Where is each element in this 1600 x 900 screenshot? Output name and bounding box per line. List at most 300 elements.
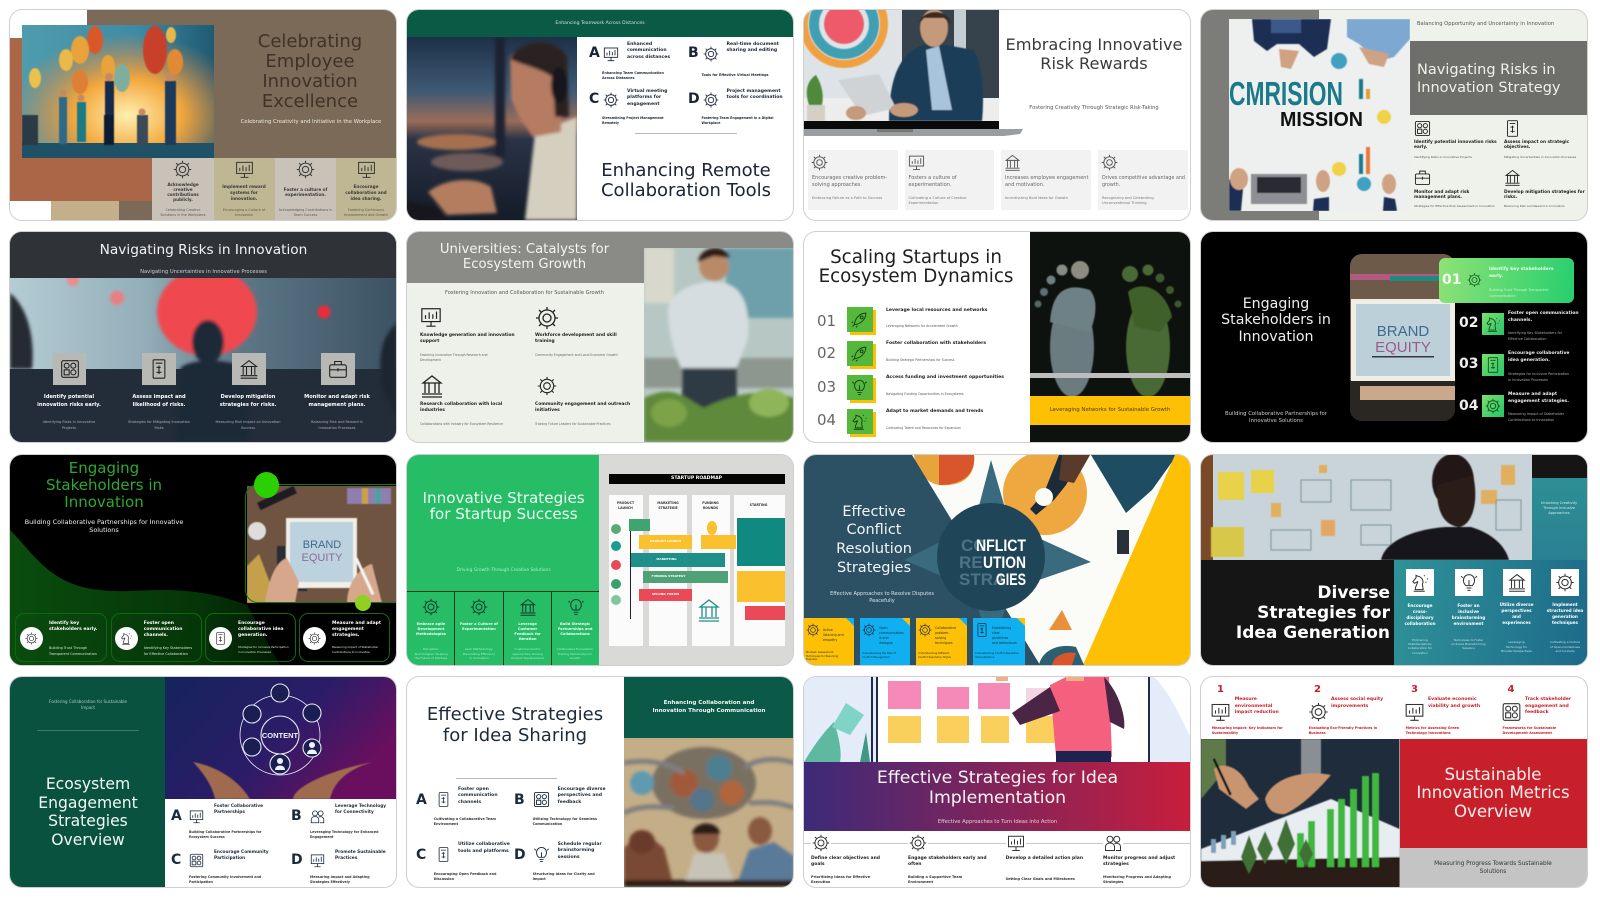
title: Innovative Strategies <box>422 488 585 506</box>
text: Promote Sustainable <box>335 850 386 855</box>
number: 1 <box>1217 684 1224 695</box>
note: Setting Clear Goals and Milestones <box>1006 877 1075 881</box>
icon: gears <box>862 623 876 637</box>
text: sessions <box>558 855 580 860</box>
note <box>862 652 896 660</box>
item note <box>344 208 388 217</box>
item text: Implement reward <box>222 184 266 188</box>
note: Across Distances <box>602 76 634 80</box>
title: Engaging <box>1243 296 1309 312</box>
text: Build Strategic <box>560 622 590 626</box>
letter A: A <box>171 808 182 824</box>
letter D: D <box>514 847 526 863</box>
text: Leverage <box>518 622 537 626</box>
letter B: B <box>688 45 699 61</box>
note: Measuring Impact: Key Indicators for <box>1212 726 1283 730</box>
note <box>975 652 1019 660</box>
title <box>1417 61 1561 97</box>
note: Ecosystem Success <box>189 835 225 839</box>
note: Technology Innovations <box>1406 730 1451 734</box>
panel: Enhancing Remote Collaboration Tools <box>407 10 793 220</box>
column: partnerships <box>552 592 599 665</box>
note <box>189 830 262 840</box>
note: Building Partnerships for <box>558 652 592 656</box>
item text <box>167 182 199 202</box>
text: Open <box>879 626 888 630</box>
note: Encouraging Open Feedback and <box>434 872 496 876</box>
note: Communication <box>533 822 562 826</box>
column: feedback <box>504 592 552 665</box>
text: Encourage <box>238 621 265 626</box>
text: across distances <box>627 55 670 60</box>
text: solving approaches. <box>812 182 862 188</box>
note: for Effective Collaboration <box>144 652 188 656</box>
text: guidelines <box>992 636 1008 640</box>
item A <box>416 787 513 829</box>
item: environmental <box>1209 683 1304 738</box>
roadmap heading: STARTUP ROADMAP <box>671 476 722 481</box>
column labels: ROUNDS <box>703 506 718 510</box>
column labels: FUNDING <box>702 501 719 505</box>
text: Practices <box>335 856 357 861</box>
note: of Open-mindedness <box>1550 645 1580 649</box>
note: Conflict Management <box>862 656 890 659</box>
title: Navigating Risks in <box>1417 62 1556 78</box>
text: Access funding and investment opportunities <box>886 375 1004 380</box>
note: Monitoring Progress and Adapting <box>1103 875 1171 879</box>
text: and motivation. <box>1005 182 1044 188</box>
note: Development Assessment <box>1502 730 1552 734</box>
item: assess <box>114 353 204 433</box>
text <box>49 621 97 633</box>
note: Identifying Risks in Innovative Projects <box>1414 154 1472 158</box>
note: Utilizing Technology for Seamless <box>533 816 597 820</box>
illustration: people around network brain <box>624 738 794 887</box>
corner accent <box>1016 618 1024 626</box>
text: Foster open <box>144 621 174 626</box>
item: measure <box>299 613 390 662</box>
card: red <box>745 606 785 620</box>
header text: Innovation Through Communication <box>653 708 765 714</box>
text: cross- <box>1413 609 1427 614</box>
subtitle: Fostering Collaboration for Sustainable <box>49 699 127 704</box>
note <box>189 874 261 884</box>
icon: umbrella <box>1004 155 1020 171</box>
panel: Effective Strategies for Idea Implementation <box>804 677 1190 887</box>
panel: Effective Strategies for Idea Sharing <box>407 677 793 887</box>
text: Utilize collaborative <box>458 842 510 847</box>
item D <box>514 842 619 884</box>
green panel <box>407 455 598 665</box>
subtitle <box>830 591 934 604</box>
text <box>558 842 602 861</box>
text: Project management <box>726 89 781 94</box>
text: disciplinary <box>1406 615 1434 620</box>
title: Innovation Metrics <box>1416 783 1570 802</box>
text: communication <box>627 48 667 53</box>
text: experimentation. <box>908 182 951 188</box>
icon disc <box>115 626 138 650</box>
text: collaborative idea <box>238 627 284 632</box>
note <box>310 874 370 884</box>
item text: publicly. <box>173 197 193 202</box>
text: Develop a detailed action plan <box>1006 856 1083 861</box>
text: Customer <box>518 627 537 631</box>
item: identify <box>24 353 114 433</box>
subtitle <box>1225 410 1327 424</box>
title <box>877 768 1118 808</box>
text: early. <box>1489 274 1503 279</box>
item: develop <box>1504 169 1586 209</box>
text: often <box>908 862 921 867</box>
text: engagement strategies. <box>1508 398 1569 404</box>
item: cross-disciplinary <box>1396 569 1444 661</box>
item: problem solving <box>808 150 898 210</box>
item note: Improvement and Growth <box>344 213 388 217</box>
column labels: LAUNCH <box>618 506 633 510</box>
brown header block <box>87 10 397 158</box>
note <box>1550 640 1580 654</box>
note: Measuring Impact of Stakeholder <box>332 644 378 648</box>
item: encourage <box>205 613 296 662</box>
text: Foster a Culture of <box>460 622 498 626</box>
title: Excellence <box>262 91 358 112</box>
note: Prioritizing Ideas for Effective <box>811 875 870 879</box>
text <box>304 393 370 409</box>
text: Leverage local resources and networks <box>886 308 988 313</box>
text: Increases employee engagement <box>1005 174 1088 180</box>
step 04 <box>1459 392 1584 425</box>
text: experiences <box>1502 620 1531 625</box>
green circle accent <box>254 472 278 498</box>
icon: hand <box>436 791 451 808</box>
number: 01 <box>817 312 836 330</box>
title band <box>804 762 1191 831</box>
bar labels: SECOND FORUM <box>652 592 679 596</box>
column labels: STRATEGIE <box>658 506 678 510</box>
note <box>602 116 664 125</box>
item: identify <box>15 613 107 662</box>
number: 02 <box>1459 315 1478 331</box>
side text <box>1541 500 1577 516</box>
icon tile: chess <box>1482 313 1504 335</box>
text: tools and platforms <box>458 849 509 854</box>
text: Leverage Technology <box>335 804 386 809</box>
subtitle <box>49 699 127 711</box>
subtitle <box>25 518 183 534</box>
icon tile: phone <box>1482 354 1504 376</box>
text: Experimentation <box>462 627 496 631</box>
note <box>1508 330 1562 342</box>
compass word: GIES <box>996 570 1026 589</box>
title <box>819 249 1013 286</box>
text: Monitor progress and adjust <box>1103 856 1175 861</box>
item: guidelines <box>973 618 1024 665</box>
icon: gear badge <box>908 834 928 852</box>
title <box>836 502 912 577</box>
roadmap column: launch <box>609 495 643 646</box>
text <box>37 393 101 409</box>
icon: network <box>189 809 204 824</box>
text <box>144 621 182 639</box>
icon: pin <box>533 846 550 863</box>
text <box>627 42 670 60</box>
text: and behaviours <box>992 641 1017 645</box>
note: Strategies for Effective Risk Assessment in Innovation <box>1414 204 1495 208</box>
title: Enhancing Remote <box>601 160 771 181</box>
note: Cultivating a Collaborative Team <box>434 816 496 820</box>
icon: team <box>1103 834 1123 852</box>
item text: creative <box>173 187 193 192</box>
title: Overview <box>1454 802 1532 821</box>
letter D: D <box>688 91 700 107</box>
icon: dials <box>1414 120 1431 137</box>
text: empathy <box>823 638 837 642</box>
side text: Through Inclusive <box>1543 506 1575 510</box>
text: Active <box>823 628 833 632</box>
title: Diverse <box>1317 583 1390 603</box>
column: culture <box>455 592 504 665</box>
note: Approaches: Driving <box>512 652 543 656</box>
note: Technologies: Shaping <box>414 652 448 656</box>
icon: dollar arrow <box>420 374 444 398</box>
note <box>602 71 664 80</box>
text: perspectives <box>1501 608 1532 613</box>
title: Celebrating <box>258 30 362 52</box>
icon tile: dials <box>52 353 86 385</box>
text: Fosters a culture of <box>908 174 957 180</box>
text: Knowledge generation and innovation <box>420 332 515 338</box>
note: Growth <box>570 656 580 660</box>
item D <box>688 88 783 125</box>
icon: document <box>975 623 989 637</box>
icon: gear head <box>811 834 831 852</box>
photo: hand writing beside green bars and saplings <box>1201 739 1400 887</box>
text <box>935 626 956 646</box>
highlighted step 01 <box>1439 258 1574 303</box>
text: Identify potential <box>44 394 94 400</box>
note <box>216 418 280 430</box>
icon tile: idea chart <box>847 375 872 400</box>
note: Structuring Ideas for Clarity and <box>533 872 595 876</box>
item B <box>514 787 619 829</box>
corner accent <box>959 618 967 626</box>
title: Embracing Innovative <box>1005 34 1183 54</box>
note: Transparent Communication <box>49 652 97 656</box>
note: Strategies Effectively <box>310 880 350 884</box>
column labels <box>617 501 634 510</box>
text: communication <box>458 793 498 798</box>
title: Overview <box>51 831 125 849</box>
letter B: B <box>514 792 525 808</box>
note: Tools for Effective Virtual Meetings <box>702 73 769 77</box>
icon: gears <box>918 623 932 637</box>
item: foster <box>111 613 202 662</box>
note: Metrics for Assessing Green <box>1406 726 1459 730</box>
text: Measure <box>1235 697 1257 702</box>
card: yellow <box>737 571 785 602</box>
title: Innovation <box>1238 329 1314 345</box>
note: Mindset: Assessment <box>806 651 833 654</box>
text <box>879 626 904 646</box>
text: Community engagement and outreach <box>535 402 630 407</box>
item: community <box>535 374 640 430</box>
note: Technology for <box>1506 645 1527 649</box>
item: perspectives <box>1492 569 1540 661</box>
text <box>1508 390 1569 404</box>
item: implement reward <box>214 158 274 220</box>
text <box>220 393 276 409</box>
text: Workforce development and skill <box>535 332 617 338</box>
icon: coin <box>706 521 716 535</box>
item: brainstorming <box>1444 569 1492 661</box>
note: Innovation Processes <box>319 426 355 430</box>
text: strategies for risks. <box>220 402 276 408</box>
text: Foster open communication <box>1508 311 1579 316</box>
text <box>1508 350 1569 364</box>
text: viability and growth <box>1428 704 1480 709</box>
item text: collaboration and <box>345 190 387 194</box>
corner accent <box>902 618 910 626</box>
compass word: NFLICT <box>976 536 1027 555</box>
text: Assess impact and <box>132 394 186 400</box>
text <box>1331 697 1383 710</box>
note: Mitigating Uncertainties in Innovation Processes <box>1504 154 1576 158</box>
panel: Scaling Startups in Ecosystem Dynamics <box>804 232 1190 442</box>
text: Collaborative <box>935 626 956 630</box>
title: Sustainable <box>1444 764 1542 784</box>
title: Innovation <box>262 71 358 92</box>
item: assess <box>1504 120 1586 160</box>
note <box>1212 726 1283 736</box>
note: Disruption: <box>423 647 439 651</box>
title: Employee <box>265 51 355 72</box>
title: for Startup Success <box>430 505 578 523</box>
text: management plans. <box>1414 195 1462 200</box>
text: perspectives and <box>558 793 602 798</box>
note: Balancing Risk and Reward in <box>311 420 363 424</box>
note: Product Development <box>511 656 544 660</box>
title: Strategies <box>48 812 128 830</box>
note: Lean Methodology: <box>465 647 493 651</box>
note <box>1408 638 1432 655</box>
text: early. <box>1414 145 1427 150</box>
note: Measuring Impact of Stakeholder <box>1508 412 1564 416</box>
note <box>43 418 95 430</box>
letter B: B <box>291 808 302 824</box>
text: Enhanced <box>627 42 652 47</box>
icon: book <box>1504 120 1521 137</box>
note: Recognizing and Celebrating <box>1102 196 1154 200</box>
title: Strategies for <box>1257 603 1390 623</box>
note: Understanding Conflict Resolution <box>975 652 1019 655</box>
header band <box>624 677 794 738</box>
item A <box>171 804 288 844</box>
panel: Embracing Innovative Risk Rewards <box>804 10 1190 220</box>
text: Methodologies <box>416 632 446 636</box>
text: Assess social equity <box>1331 697 1383 702</box>
title: Resolution <box>836 541 912 557</box>
icon: growth <box>908 156 924 170</box>
icon: analysis board <box>1006 834 1026 852</box>
title: Stakeholders in <box>1221 312 1331 328</box>
item: research <box>420 374 525 430</box>
note: Maximizing Efficiency <box>463 652 495 656</box>
number: 03 <box>817 378 836 396</box>
text: Utilize diverse <box>1500 602 1533 607</box>
item: listening <box>804 618 854 665</box>
note <box>1508 411 1564 423</box>
text <box>558 622 592 637</box>
subtitle: Effective Approaches to Turn Ideas into Action <box>938 819 1057 825</box>
icon tile: gear bulb <box>1551 569 1579 596</box>
title: Collaboration Tools <box>601 180 771 201</box>
icon: grid <box>533 791 550 808</box>
icon: graduation laptop <box>420 306 442 328</box>
note: Sustainability <box>1212 730 1238 734</box>
text: idea generation. <box>1508 358 1550 363</box>
text: Track stakeholder <box>1525 697 1571 702</box>
tablet word: BRAND <box>1376 323 1429 340</box>
note: Success <box>241 426 255 430</box>
icon: screen <box>310 853 325 868</box>
title <box>258 30 362 112</box>
text <box>992 626 1017 646</box>
title: Risk Rewards <box>1040 54 1148 72</box>
note <box>414 647 448 661</box>
text: engagement <box>627 102 660 107</box>
number: 03 <box>1459 356 1478 372</box>
step 04 <box>817 409 1022 439</box>
icon: dollar gear <box>812 154 828 170</box>
note: in Innovation <box>469 656 489 660</box>
subtitle: Solutions <box>1480 869 1506 875</box>
subtitle: Impact <box>81 705 95 710</box>
icon: presentation board <box>236 162 253 178</box>
text: Measure and adapt <box>1508 392 1557 396</box>
tan accent block <box>51 201 119 220</box>
note: Leveraging Networks for Accelerated Growth <box>886 324 958 328</box>
text: Develop mitigation strategies for <box>1504 190 1585 194</box>
note: Embracing <box>1412 638 1428 642</box>
icon tile: book <box>142 353 176 385</box>
title: Stakeholders in <box>46 476 162 494</box>
note: Discussion <box>434 876 454 880</box>
column labels: STARTING <box>750 503 767 507</box>
item: engagement <box>1001 150 1091 210</box>
item note: Fostering Continuous <box>348 208 384 212</box>
icon: analysis board <box>358 162 375 178</box>
note: Navigating Funding Opportunities in Ecosystems <box>886 392 964 396</box>
item note: Innovation <box>235 213 253 217</box>
header text: Enhancing Teamwork Across Distances <box>555 21 645 26</box>
title <box>1416 766 1570 822</box>
text: feedback <box>1525 710 1549 715</box>
note <box>434 872 496 882</box>
photo: content cycle above hands <box>165 677 397 799</box>
text <box>1005 174 1088 188</box>
note: Frameworks for Sustainable <box>1502 726 1556 730</box>
note: Evaluating Eco-Friendly Practices in <box>1309 726 1377 730</box>
text: brainstorming <box>1452 615 1485 620</box>
note: Multidisciplinary <box>1408 642 1432 646</box>
text <box>514 622 541 642</box>
note <box>702 116 774 125</box>
column labels: MARKETING <box>657 501 679 505</box>
note <box>144 644 192 656</box>
text <box>1489 267 1554 280</box>
subtitle: Effective Approaches to Resolve Disputes <box>830 591 934 597</box>
